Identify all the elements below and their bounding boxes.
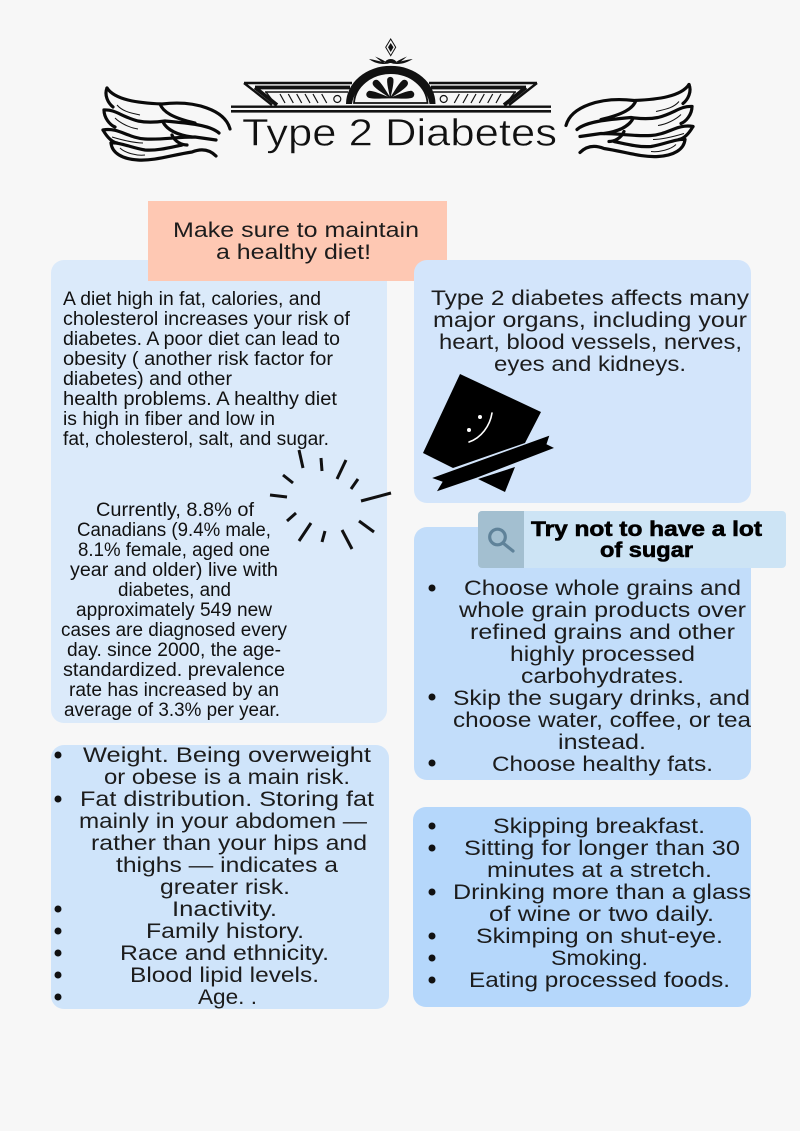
text: Canadian statistics paragraph [61,500,287,721]
icon: smiling square with ribbon [423,374,555,492]
icon: magnifying glass [490,529,513,551]
panel: risk factors: mainly in your abdomen — [79,810,367,833]
panel: sugar advice: Choose whole grains and [464,577,741,600]
panel: habits to avoid: Drinking more than a glass [453,881,751,904]
panel: affected organs: heart, blood vessels, nerves, [439,331,742,354]
panel: habits to avoid: Skipping breakfast. [493,815,705,838]
text: Canadian statistics paragraph: standardized. prevalence [63,660,285,681]
callout: healthy diet: Make sure to maintain [173,219,419,242]
callout: healthy diet: a healthy diet! [216,241,371,264]
panel: risk factors: thighs — indicates a [116,854,338,877]
text: diet paragraph: is high in fiber and low in [63,409,275,430]
panel: sugar advice: instead. [558,731,646,754]
text: diet paragraph: diabetes. A poor diet can lead to [63,329,340,350]
panel: affected organs: Type 2 diabetes affects many [431,287,750,310]
text: Canadian statistics paragraph: cases are diagnosed every [61,620,287,641]
left deck [244,83,352,105]
panel: habits to avoid: of wine or two daily. [489,903,714,926]
text: diet paragraph: fat, cholesterol, salt, and sugar. [63,429,329,450]
text: Canadian statistics paragraph: year and older) live with [70,560,278,581]
callout: healthy diet [148,201,447,281]
panel: sugar advice [414,527,751,780]
panel: sugar advice: Choose healthy fats. [492,753,713,776]
panel: sugar advice: carbohydrates. [521,665,684,688]
header ornament [231,39,551,113]
text: Canadian statistics paragraph: approximately 549 new [76,600,272,621]
panel: sugar advice: highly processed [510,643,695,666]
callout: try not to have a lot of sugar: of sugar [600,539,693,562]
text: Canadian statistics paragraph: Canadians (9.4% male, [77,520,271,541]
callout: try not to have a lot of sugar: Try not to have a lot [531,518,762,541]
panel: risk factors: greater risk. [160,876,290,899]
panel: risk factors: or obese is a main risk. [104,766,350,789]
text: Canadian statistics paragraph: diabetes, and [118,580,231,601]
text: Canadian statistics paragraph: 8.1% female, aged one [78,540,270,561]
text: Canadian statistics paragraph: Currently, 8.8% of [96,500,255,521]
panel: sugar advice: refined grains and other [470,621,735,644]
text: diet paragraph: cholesterol increases your risk of [63,309,351,330]
panel: risk factors: Blood lipid levels. [130,964,319,987]
panel: sugar advice: whole grain products over [458,599,746,622]
right deck [429,83,537,105]
panel: habits to avoid: Smoking. [551,947,648,970]
panel: risk factors: Inactivity. [172,898,277,921]
panel: diet and statistics [51,260,387,723]
callout: try not to have a lot of sugar [478,511,786,568]
panel: sugar advice: Skip the sugary drinks, and [453,687,750,710]
right wing [566,84,693,157]
panel: risk factors: Family history. [146,920,304,943]
fan arch [346,66,436,104]
panel: affected organs: eyes and kidneys. [494,353,686,376]
text: diet paragraph [63,289,351,450]
panel: risk factors: Fat distribution. Storing fat [80,788,374,811]
text: Canadian statistics paragraph: average of 3.3% per year. [64,700,280,721]
panel: habits to avoid [413,807,751,1007]
panel: affected organs: major organs, including your [433,309,747,332]
panel: habits to avoid: Skimping on shut-eye. [476,925,723,948]
panel: risk factors: rather than your hips and [91,832,367,855]
text: diet paragraph: obesity ( another risk factor for [63,349,334,370]
text: diet paragraph: diabetes) and other [63,369,233,390]
text: Canadian statistics paragraph: day. since 2000, the age- [67,640,281,661]
text: Canadian statistics paragraph: rate has increased by an [69,680,279,701]
panel: habits to avoid: minutes at a stretch. [487,859,712,882]
panel: sugar advice: choose water, coffee, or tea [453,709,751,732]
panel: risk factors: Race and ethnicity. [120,942,329,965]
title: Type 2 Diabetes [242,112,557,154]
text: diet paragraph: health problems. A healthy diet [63,389,338,410]
icon: sparkle burst [270,450,391,549]
text: diet paragraph: A diet high in fat, calories, and [63,289,321,310]
panel: risk factors: Age. . [198,986,257,1009]
panel: habits to avoid: Eating processed foods. [469,969,730,992]
panel: affected organs [414,260,751,503]
panel: risk factors [51,744,389,1009]
panel: habits to avoid: Sitting for longer than 30 [464,837,740,860]
panel: risk factors: Weight. Being overweight [83,744,371,767]
left wing [103,88,230,160]
